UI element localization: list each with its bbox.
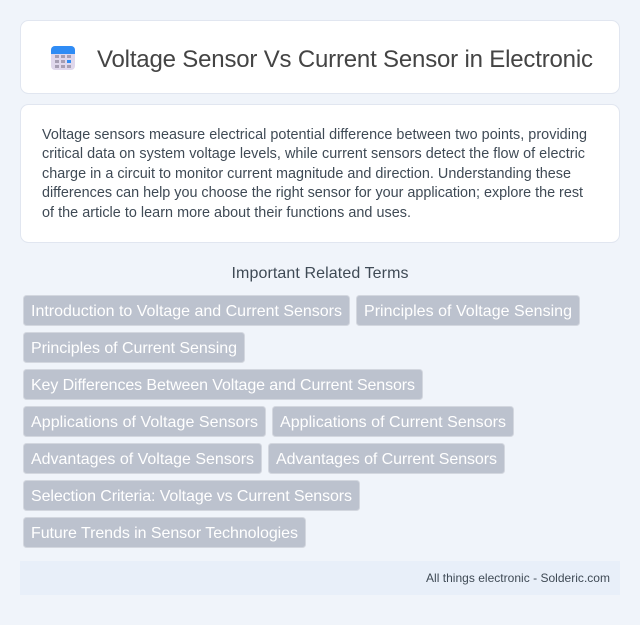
panel: intro paragraph: charge in a circuit to monitor current magnitude and direction. Understanding these [42, 166, 571, 182]
panel: intro paragraph: critical data on system voltage levels, while current sensors detect the flow of electric [42, 146, 585, 162]
tag: introduction: Introduction to Voltage and Current Sensors [31, 303, 342, 320]
tag: applications of voltage sensors [24, 406, 266, 436]
tag: introduction [24, 296, 350, 326]
icon: calendar [51, 46, 75, 70]
heading: important related terms: Important Related Terms [232, 265, 408, 282]
tag: selection criteria: Selection Criteria: Voltage vs Current Sensors [31, 488, 352, 505]
tag: applications of current sensors: Applications of Current Sensors [280, 414, 506, 431]
footer [20, 561, 620, 595]
tag: advantages of current sensors [268, 444, 504, 474]
title: Voltage Sensor Vs Current Sensor in Electronic [97, 46, 593, 73]
tag: applications of current sensors [272, 406, 514, 436]
tag: future trends [24, 518, 306, 548]
footer: All things electronic - Solderic.com [426, 571, 610, 585]
tag: advantages of voltage sensors [24, 444, 262, 474]
panel: intro paragraph: of the article to learn more about their functions and uses. [42, 205, 411, 221]
tag: principles of voltage sensing [356, 296, 580, 326]
tag: principles of current sensing: Principles of Current Sensing [31, 340, 237, 357]
tag: principles of current sensing [24, 332, 244, 362]
tag: key differences [24, 370, 422, 400]
tag: future trends: Future Trends in Sensor Technologies [31, 525, 298, 542]
tag: advantages of current sensors: Advantages of Current Sensors [276, 451, 497, 468]
tag: principles of voltage sensing: Principles of Voltage Sensing [364, 303, 572, 320]
panel: intro paragraph: Voltage sensors measure electrical potential difference between two points, providing [42, 127, 587, 143]
panel: title header [20, 20, 620, 94]
tag: applications of voltage sensors: Applications of Voltage Sensors [31, 414, 258, 431]
tag: advantages of voltage sensors: Advantages of Voltage Sensors [31, 451, 254, 468]
panel: intro paragraph [20, 104, 620, 242]
panel: intro paragraph: differences can help you choose the right sensor for your application; explore the rest [42, 185, 583, 201]
tag: key differences: Key Differences Between Voltage and Current Sensors [31, 377, 415, 394]
tag: selection criteria [24, 480, 360, 510]
